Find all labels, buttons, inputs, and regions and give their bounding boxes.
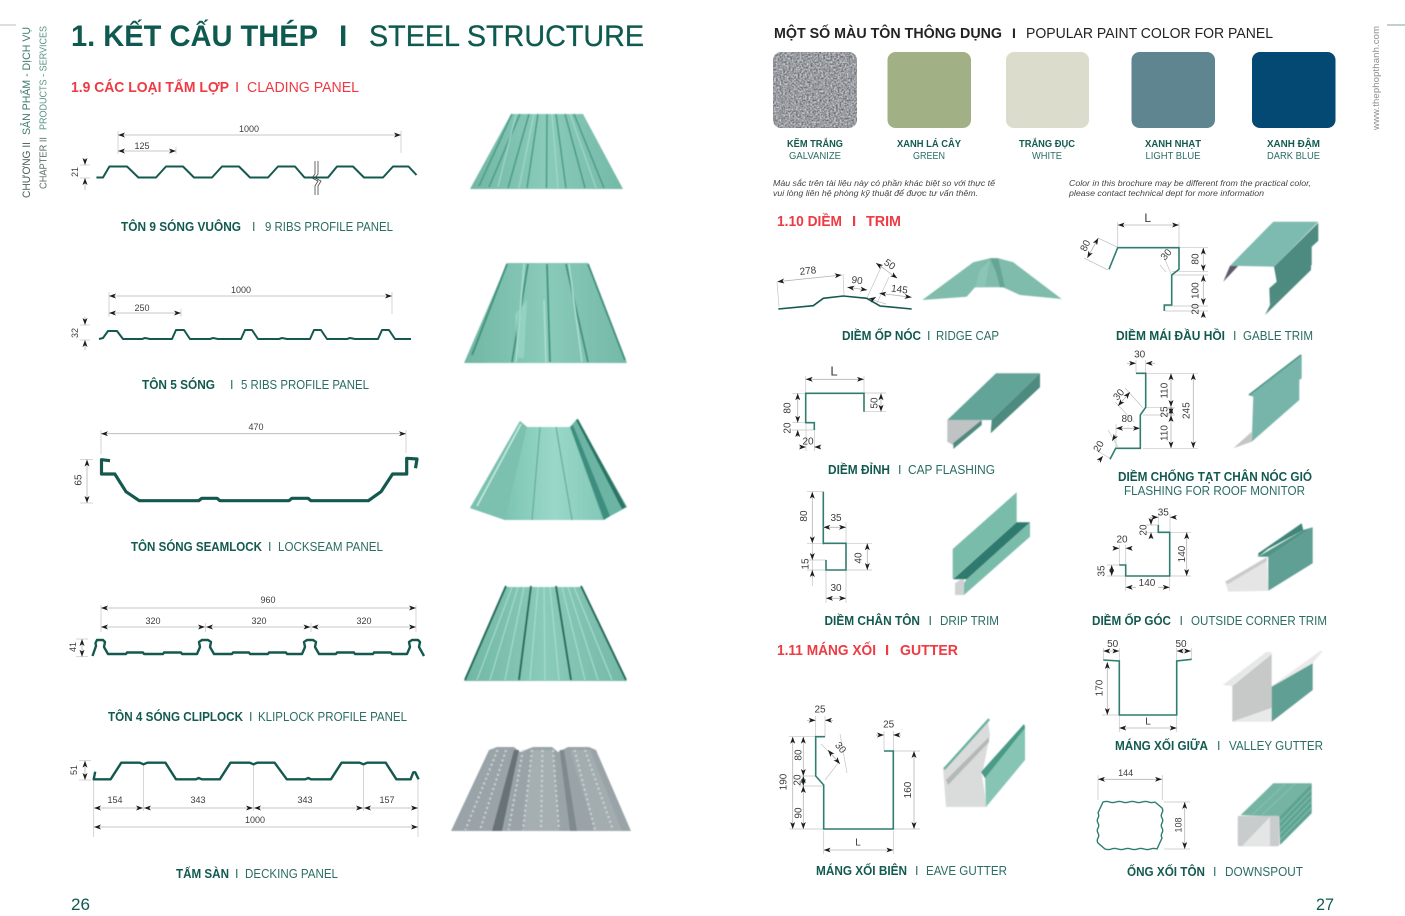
panel: decking [69,747,631,881]
label: ridge cap: I [927,329,930,343]
drawing: gable trim: 80 [1190,253,1202,265]
label: outside corner trim: OUTSIDE CORNER TRIM [1191,614,1327,628]
drawing: valley gutter [1094,639,1192,732]
drawing: decking profile: 1000 [245,815,265,825]
panel: outside corner trim [1092,508,1327,628]
drawing: decking profile: 157 [379,795,395,805]
drawing: cliplock profile [68,595,424,657]
drawing: 9 ribs profile: 125 [134,141,150,151]
drawing: 5 ribs profile: 32 [70,328,80,338]
drawing: drip trim: 35 [830,513,842,524]
colour note: please contact technical dept for more information [1068,188,1264,198]
image: decking panel [451,747,631,831]
swatch: white [1006,52,1089,162]
drawing: 5 ribs profile [70,285,411,350]
drawing: seamlock profile: 470 [248,422,264,432]
image: valley gutter [1223,651,1323,722]
label: valley gutter: I [1217,739,1220,753]
drawing: roof monitor flashing: 245 [1182,402,1192,419]
image: gable trim [1223,222,1318,315]
drawing: downspout [1097,768,1190,850]
drawing: 5 ribs profile: 1000 [231,285,251,295]
page number 26: 26 [71,895,90,914]
drawing: 9 ribs profile [70,124,416,195]
drawing: eave gutter [778,704,920,854]
image: roof monitor flashing [1233,355,1302,448]
image: cliplock panel [464,586,627,681]
drawing: 9 ribs profile: 21 [70,167,80,177]
label: downspout [1127,864,1303,879]
title: I [339,20,347,53]
label: cliplock: KLIPLOCK PROFILE PANEL [258,710,407,724]
label: outside corner trim: DIỀM ỐP GÓC [1092,613,1171,628]
image: seamlock panel [470,419,627,520]
section heading: clading panel: CLADING PANEL [247,79,359,96]
label: 9 ribs: 9 RIBS PROFILE PANEL [265,220,393,234]
drawing: gable trim: 80 [1079,238,1094,253]
drawing: cap flashing: 20 [802,436,814,448]
heading: popular colours: MỘT SỐ MÀU TÔN THÔNG DỤNG [774,24,1002,42]
title: STEEL STRUCTURE [369,20,644,53]
panel: 5 ribs [70,263,627,392]
swatch: light blue [1132,52,1215,162]
drawing: eave gutter: 30 [832,740,848,756]
image: downspout [1238,783,1312,846]
swatch: light blue: LIGHT BLUE [1146,151,1201,162]
drawing: gable trim: 100 [1190,282,1202,299]
heading: popular colours: POPULAR PAINT COLOR FOR PANEL [1026,26,1273,42]
label: ridge cap [842,328,999,343]
page number 27: 27 [1316,895,1334,914]
drawing: outside corner trim: 35 [1158,508,1169,518]
label: drip trim: DRIP TRIM [940,614,999,628]
label: eave gutter: I [915,864,918,878]
label: drip trim: I [928,614,932,628]
drawing: cap flashing: 20 [782,422,794,434]
label: gable trim: GABLE TRIM [1243,329,1313,343]
vertical chapter text: SẢN PHẨM - DỊCH VỤ [20,27,33,135]
label: 5 ribs [142,377,369,392]
drawing: gable trim [1079,211,1208,318]
drawing: roof monitor flashing: 80 [1121,414,1133,425]
drawing: outside corner trim: 20 [1116,534,1128,546]
label: ridge cap: RIDGE CAP [936,329,999,343]
drawing: roof monitor flashing [1092,350,1198,462]
section heading: clading panel [71,79,359,96]
panel: seamlock [74,419,627,554]
panel: eave gutter [778,704,1025,878]
panel: drip trim [799,492,1030,628]
swatch: dark blue: DARK BLUE [1267,151,1320,162]
label: valley gutter: MÁNG XỐI GIỮA [1115,738,1208,753]
drawing: eave gutter: 80 [794,749,804,761]
image: cap flashing [947,373,1040,449]
swatch: white: TRẮNG ĐỤC [1019,137,1075,150]
drawing: eave gutter: 20 [792,774,804,786]
image: 9 ribs panel [470,114,623,189]
drawing: cap flashing: 80 [782,402,794,414]
panel: ridge cap [777,257,1062,343]
label: gable trim: I [1233,329,1236,343]
label: 5 ribs: 5 RIBS PROFILE PANEL [241,378,369,392]
vertical chapter text [20,26,50,198]
vertical chapter text: PRODUCTS - SERVICES [38,26,50,130]
corner rule right [1387,24,1405,26]
panel: gable trim [1079,211,1318,343]
drawing: decking profile: 154 [107,795,123,805]
label: 9 ribs: TÔN 9 SÓNG VUÔNG [121,219,241,234]
swatch: galvanize: GALVANIZE [789,151,841,162]
swatch: galvanize: KẼM TRẮNG [787,137,843,150]
section heading: trim: TRIM [866,213,901,230]
label: gable trim [1116,328,1313,343]
label: seamlock: I [268,540,271,554]
label: roof monitor flashing [1118,469,1312,498]
swatch: green: XANH LÁ CÂY [897,137,961,150]
drawing: outside corner trim [1096,508,1191,591]
drawing: roof monitor flashing: 20 [1092,439,1107,454]
vertical chapter text: CHAPTER II [38,137,50,189]
drawing: downspout: 108 [1174,817,1184,833]
label: cap flashing: I [898,463,901,477]
label: gable trim: DIỀM MÁI ĐẦU HỒI [1116,328,1225,343]
heading: popular colours: I [1012,25,1016,41]
drawing: cliplock profile: 41 [68,642,78,652]
colour note: Color in this brochure may be different from the practical color, [1069,178,1311,188]
drawing: valley gutter: 50 [1107,639,1119,650]
label: decking: I [235,867,238,881]
image: 5 ribs panel [464,263,627,363]
drawing: eave gutter: 90 [794,807,804,819]
drawing: cap flashing: L [830,364,838,378]
panel: valley gutter [1094,639,1323,753]
drawing: 9 ribs profile: 1000 [239,124,259,134]
drawing: roof monitor flashing: 30 [1134,350,1146,360]
panel: roof monitor flashing [1092,350,1312,498]
label: decking: TẤM SÀN [176,866,229,881]
title: 1. KẾT CẤU THÉP [71,19,318,53]
label: eave gutter: EAVE GUTTER [926,864,1007,878]
drawing: drip trim: 30 [830,583,842,594]
label: downspout: DOWNSPOUT [1225,865,1303,879]
panel: cap flashing [782,364,1040,477]
vertical website: www.thephopthanh.com [1371,26,1382,131]
colour note: Màu sắc trên tài liệu này có phần khác biệt so với thực tế [773,178,996,188]
label: 9 ribs: I [252,220,255,234]
label: cap flashing [828,462,995,477]
label: ridge cap: DIỀM ỐP NÓC [842,328,921,343]
drawing: decking profile [69,761,419,837]
image: ridge cap [922,258,1062,300]
label: roof monitor flashing: FLASHING FOR ROOF MONITOR [1124,484,1305,498]
image: outside corner trim [1225,523,1313,592]
title [71,19,644,53]
label: roof monitor flashing: DIỀM CHỐNG TẠT CHÂN NÓC GIÓ [1118,469,1312,484]
drawing: roof monitor flashing: 110 [1160,382,1170,399]
drawing: drip trim: 15 [800,558,812,570]
section heading: clading panel: I [235,79,239,96]
swatch: galvanize [773,52,857,162]
drawing: outside corner trim: 20 [1138,524,1150,536]
drawing: ridge cap [777,257,912,309]
drawing: valley gutter: 50 [1175,639,1187,650]
label: cliplock: TÔN 4 SÓNG CLIPLOCK [108,709,243,724]
drawing: ridge cap: 278 [799,265,817,278]
drawing: roof monitor flashing: 110 [1160,425,1170,441]
label: cap flashing: CAP FLASHING [908,463,995,477]
heading: popular colours [774,24,1273,42]
swatch: light blue: XANH NHẠT [1145,139,1201,150]
image: eave gutter [943,718,1025,807]
label: drip trim: DIỀM CHÂN TÔN [824,613,920,628]
label: valley gutter [1115,738,1323,753]
label: downspout: I [1213,865,1216,879]
drawing: drip trim: 40 [854,552,864,564]
drawing: eave gutter: L [855,838,861,848]
drawing: ridge cap: 145 [890,283,909,297]
drawing: roof monitor flashing: 25 [1160,406,1170,418]
label: cliplock: I [249,710,252,724]
panel: 9 ribs [70,114,623,234]
label: 5 ribs: TÔN 5 SÓNG [142,377,215,392]
drawing: outside corner trim: 140 [1177,545,1188,562]
section heading: gutter [777,641,958,659]
label: seamlock [131,539,383,554]
drawing: cliplock profile: 320 [251,616,267,626]
colour note [773,178,1311,198]
label: downspout: ỐNG XỐI TÔN [1127,864,1205,879]
drawing: valley gutter: L [1145,716,1151,728]
drawing: decking profile: 343 [297,795,313,805]
section heading: gutter: I [885,642,889,659]
label: eave gutter: MÁNG XỐI BIÊN [816,863,907,878]
panel: downspout [1097,768,1312,879]
label: outside corner trim: I [1180,614,1183,628]
drawing: gable trim: 20 [1190,303,1202,315]
section heading: trim: 1.10 DIỀM [777,213,842,230]
swatch: dark blue [1252,52,1336,162]
label: seamlock: TÔN SÓNG SEAMLOCK [131,539,262,554]
drawing: cliplock profile: 320 [356,616,372,626]
drawing: drip trim [799,492,872,603]
panel: cliplock [68,586,627,724]
label: outside corner trim [1092,613,1327,628]
drawing: decking profile: 51 [69,765,79,775]
drawing: ridge cap: 50 [882,257,897,273]
label: valley gutter: VALLEY GUTTER [1229,739,1323,753]
section heading: trim: I [852,213,856,230]
swatch: green: GREEN [913,151,945,162]
drawing: downspout: 144 [1118,768,1133,778]
section heading: clading panel: 1.9 CÁC LOẠI TẤM LỢP [71,79,229,96]
label: 5 ribs: I [230,378,233,392]
label: drip trim [824,613,999,628]
drawing: gable trim: 30 [1159,247,1175,263]
drawing: 5 ribs profile: 250 [134,303,150,313]
label: cap flashing: DIỀM ĐỈNH [828,462,890,477]
drawing: seamlock profile: 65 [74,474,84,486]
drawing: gable trim: L [1144,211,1151,225]
drawing: eave gutter: 190 [778,773,790,790]
label: decking [176,866,338,881]
drawing: decking profile: 343 [190,795,206,805]
drawing: eave gutter: 25 [883,720,895,730]
vertical chapter text: CHƯƠNG II [21,142,33,198]
swatch: green [888,52,971,162]
swatch: dark blue: XANH ĐẬM [1267,137,1320,150]
drawing: ridge cap: 90 [851,275,864,287]
drawing: drip trim: 80 [799,510,810,522]
label: decking: DECKING PANEL [245,867,338,881]
label: 9 ribs [121,219,393,234]
section heading: gutter: 1.11 MÁNG XỐI [777,641,876,659]
drawing: cliplock profile: 960 [260,595,276,605]
label: cliplock [108,709,407,724]
image: drip trim [953,492,1030,595]
section heading: gutter: GUTTER [900,642,958,659]
drawing: roof monitor flashing: 30 [1112,387,1127,403]
drawing: outside corner trim: 140 [1139,578,1156,589]
section heading: trim [777,213,901,230]
drawing: seamlock profile [74,422,417,503]
label: seamlock: LOCKSEAM PANEL [278,540,383,554]
drawing: valley gutter: 170 [1094,679,1106,696]
drawing: cliplock profile: 320 [145,616,161,626]
drawing: cap flashing: 50 [870,397,880,409]
colour note: vui lòng liên hệ phòng kỹ thuật để được tư vấn thêm. [773,188,978,198]
swatch: white: WHITE [1032,151,1062,162]
label: eave gutter [816,863,1007,878]
page corner rule left [0,24,16,26]
drawing: eave gutter: 25 [814,704,826,716]
drawing: cap flashing [782,364,886,451]
drawing: eave gutter: 160 [903,781,914,798]
drawing: outside corner trim: 35 [1096,565,1108,577]
